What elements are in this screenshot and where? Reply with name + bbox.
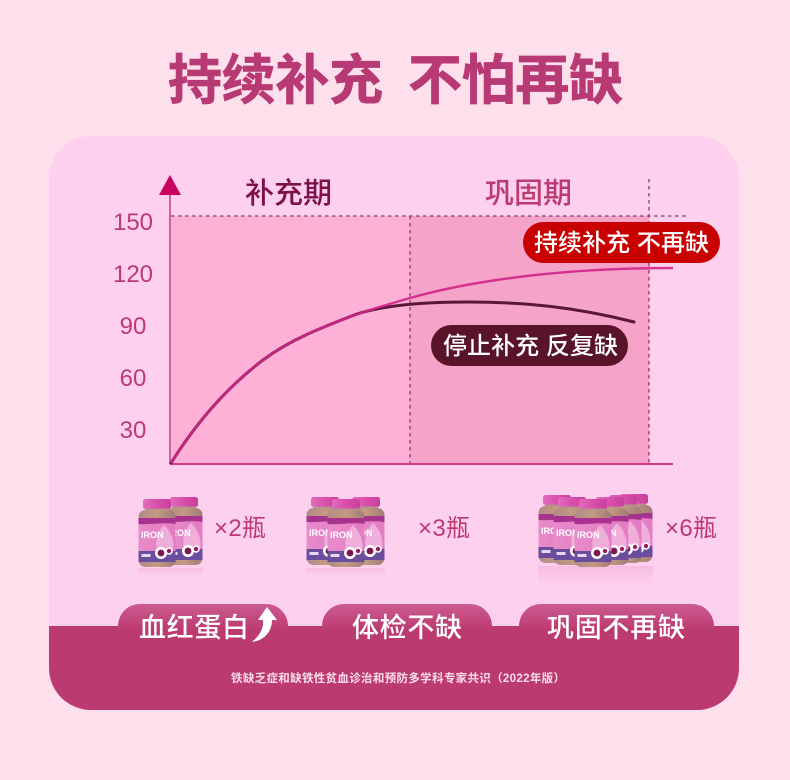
heading: replenishment period: 补充期 [245, 177, 332, 210]
pill: hemoglobin up: 血红蛋白 [139, 613, 249, 643]
bottom band [49, 626, 739, 710]
callout: stop supplementing: 停止补充 反复缺 [443, 333, 618, 360]
title: 不怕再缺 [408, 51, 623, 111]
pill: hemoglobin up [118, 604, 288, 648]
bottles: three: IRON [350, 528, 372, 538]
consolidation period background [410, 216, 649, 464]
title: 持续补充 [168, 51, 383, 111]
label: x2 bottles: ×2瓶 [214, 515, 266, 542]
label: x6 bottles: ×6瓶 [665, 515, 717, 542]
bottles: three: IRON [330, 530, 352, 540]
y axis with arrow [159, 175, 181, 464]
callout: keep supplementing [523, 222, 720, 263]
bottles: six: IRON [577, 530, 600, 540]
x axis [170, 463, 673, 465]
bottles: six [538, 494, 653, 594]
bottles: two: IRON [141, 530, 164, 540]
y axis labels: 150 [113, 209, 153, 236]
heading: consolidation period: 巩固期 [485, 178, 572, 210]
bottles: three [306, 497, 385, 580]
title [168, 51, 623, 111]
curve: stop supplementing [171, 302, 634, 463]
bottles: six: IRON [541, 526, 564, 536]
chart: iron level curves [159, 175, 686, 464]
y axis labels: 30 [120, 417, 146, 444]
bottles: six: IRON [594, 528, 616, 538]
callout: stop supplementing [431, 325, 628, 366]
y axis labels: 90 [120, 313, 146, 340]
bottles: two: IRON [168, 528, 190, 538]
pill: consolidated no more deficiency: 巩固不再缺 [547, 613, 685, 643]
panel: chart card [49, 136, 739, 710]
callout: keep supplementing: 持续补充 不再缺 [534, 230, 709, 257]
footnote: source: 铁缺乏症和缺铁性贫血诊治和预防多学科专家共识（2022年版） [231, 671, 565, 685]
icon: up arrow [252, 607, 277, 642]
replenishment period background [171, 216, 410, 464]
pill: checkup not deficient [322, 604, 492, 648]
y axis labels: 60 [120, 365, 146, 392]
bottles: three: IRON [309, 528, 332, 538]
curve: keep supplementing [171, 268, 673, 463]
bottles: two [138, 497, 203, 580]
y axis labels: 120 [113, 261, 153, 288]
label: x3 bottles: ×3瓶 [418, 515, 470, 542]
y axis labels [113, 209, 153, 444]
pill: checkup not deficient: 体检不缺 [352, 613, 462, 643]
bottles: six: IRON [556, 528, 578, 538]
pill: consolidated no more deficiency [519, 604, 714, 648]
bottles: six: IRON [618, 525, 640, 535]
bottles: six: IRON [607, 526, 630, 536]
